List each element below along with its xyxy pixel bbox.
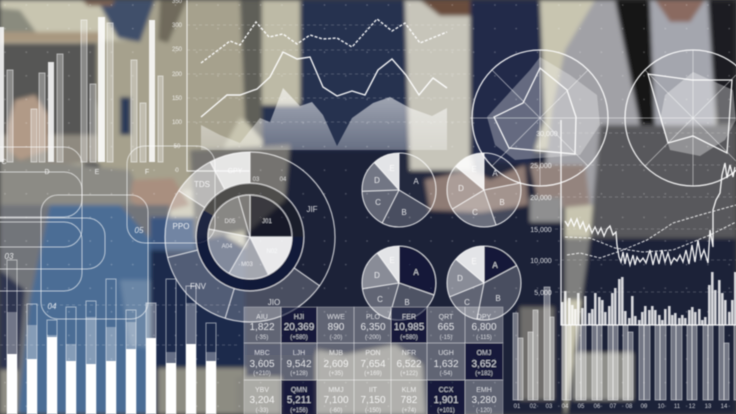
dashed trend line upper — [565, 222, 736, 252]
table row 1: (-20) — [330, 335, 342, 341]
pie chart 2: D — [458, 184, 464, 193]
table row 1: 890 — [328, 322, 345, 333]
right chart x-axis labels — [514, 404, 728, 410]
pie chart 2: E — [471, 165, 477, 174]
table cells — [244, 307, 503, 414]
table row 1: (-15) — [440, 335, 452, 341]
right chart x-axis labels: 05 — [578, 404, 585, 410]
table row 2: NFR — [402, 350, 416, 357]
pie chart 3: A — [413, 268, 419, 277]
pie chart 4: A — [492, 261, 498, 270]
right chart x-axis labels: 01 — [514, 404, 521, 410]
pie chart 1: A — [413, 177, 419, 186]
pie chart 3: B — [404, 298, 410, 307]
right chart x-axis labels: 04 — [562, 404, 569, 410]
table row 2: (+169) — [364, 371, 382, 377]
pie chart 3: E — [389, 256, 395, 265]
pie chart 1: D — [374, 176, 380, 185]
bar group labels — [1, 159, 149, 176]
radar chart 1 — [472, 50, 608, 186]
right chart lower bars — [513, 287, 736, 400]
table row 3: (-33) — [256, 408, 268, 414]
table row 3: (-120) — [476, 408, 492, 414]
solid line chart — [201, 52, 447, 117]
right chart x-axis labels: 11 — [674, 404, 681, 410]
rounded outline panels — [0, 146, 215, 319]
table row 3: QMN — [291, 387, 307, 394]
pie chart 4: E — [471, 257, 477, 266]
table row 2: (+35) — [329, 371, 343, 377]
table row 1: 665 — [438, 322, 455, 333]
line chart axis: 200 — [172, 72, 183, 78]
right chart x-axis labels: 13 — [705, 404, 712, 410]
table row 3: 782 — [401, 395, 418, 406]
donut labels: 03 — [253, 177, 260, 183]
table row 2: 3,605 — [249, 359, 275, 370]
table row 3: (+101) — [437, 408, 455, 414]
dashed line chart — [201, 19, 447, 63]
panel numbers: 04 — [48, 302, 57, 311]
table row 1: QRT — [439, 314, 454, 321]
pie chart 3: D — [374, 271, 380, 280]
table row 1: (+580) — [290, 335, 308, 341]
donut labels: JIO — [268, 298, 280, 307]
table row 3: (-150) — [365, 408, 381, 414]
panel numbers: 03 — [5, 252, 14, 261]
table row 1: WWE — [327, 314, 345, 321]
panel numbers: 05 — [135, 226, 144, 235]
line chart frame — [187, 0, 250, 171]
table row 3: 7,100 — [323, 395, 349, 406]
table row 1: 6,800 — [471, 322, 497, 333]
centre person — [262, 0, 300, 105]
donut labels: PPO — [173, 222, 189, 231]
table row 3: YBV — [255, 387, 269, 394]
gridlines — [0, 25, 736, 345]
table row 2: (+210) — [253, 371, 271, 377]
right chart x-axis labels: 12 — [689, 404, 696, 410]
right chart x-axis labels: 08 — [626, 404, 633, 410]
table row 3: 7,150 — [360, 395, 386, 406]
table row 2: 7,654 — [360, 359, 386, 370]
donut outlines — [165, 152, 335, 322]
table row 2 — [249, 350, 497, 377]
donut labels: TDS — [194, 180, 210, 189]
right chart axis — [530, 163, 552, 297]
table row 1 — [249, 314, 497, 341]
table row 2: (+182) — [475, 371, 493, 377]
table row 3: 5,211 — [287, 395, 312, 406]
table row 2: OMJ — [477, 350, 491, 357]
top-left bar chart — [0, 17, 163, 162]
bar group labels: D — [44, 169, 50, 176]
pie chart 1: E — [389, 164, 395, 173]
line chart axis: 300 — [172, 23, 183, 29]
table row 3: MMJ — [328, 387, 344, 394]
donut labels: D05 — [224, 219, 236, 225]
table row 1: (-200) — [365, 335, 381, 341]
line chart axis: 0 — [175, 168, 179, 174]
middle ring — [184, 171, 316, 303]
right chart x-axis labels: 03 — [546, 404, 553, 410]
table row 1: HJI — [294, 314, 304, 321]
table row 3: KLM — [402, 387, 416, 394]
pie chart 3: C — [377, 295, 383, 304]
table row 3: (+74) — [402, 408, 416, 414]
table row 3: 3,280 — [471, 395, 497, 406]
right chart axis: 10,000 — [530, 258, 552, 265]
donut chart — [153, 140, 347, 334]
pie chart 2: A — [492, 169, 498, 178]
line chart axis: 50 — [174, 144, 181, 150]
bottom-left stacked bars — [7, 260, 216, 414]
donut labels: N02 — [266, 249, 278, 255]
right chart axis: 20,000 — [530, 195, 552, 202]
donut labels: 04 — [280, 177, 287, 183]
inner pie sectors — [221, 208, 279, 266]
table row 2: MBC — [254, 350, 270, 357]
table row 1: (-115) — [476, 335, 492, 341]
right chart x-axis labels: 14 — [721, 404, 728, 410]
table row 3: (+156) — [290, 408, 308, 414]
right chart axis: 15,000 — [530, 227, 552, 234]
table row 2: (+128) — [290, 371, 308, 377]
pie chart 4 — [447, 246, 521, 320]
jagged price line — [565, 163, 735, 265]
pie chart 1: B — [401, 208, 407, 217]
right chart x-axis labels: 10 — [658, 404, 665, 410]
right chart x-axis labels: 06 — [594, 404, 601, 410]
donut labels: GPY — [228, 168, 243, 175]
bar group labels: F — [145, 169, 149, 176]
radar chart 2 — [625, 50, 736, 186]
table row 2: (+122) — [400, 371, 418, 377]
donut labels — [173, 168, 318, 307]
right person — [545, 0, 640, 205]
table row 2: 1,632 — [433, 359, 459, 370]
pie chart 2: C — [472, 208, 478, 217]
table row 2: 9,542 — [286, 359, 312, 370]
pie chart 3 — [362, 246, 436, 320]
line chart axis — [172, 0, 183, 174]
table row 1: (-35) — [256, 335, 268, 341]
table row 2: (-54) — [440, 371, 452, 377]
right chart axis: 25,000 — [530, 163, 552, 170]
line chart axis: 100 — [172, 120, 183, 126]
donut labels: JIF — [306, 205, 318, 214]
radar chart 1: 30,000 — [536, 131, 558, 138]
data table — [244, 307, 503, 414]
table row 1: AIU — [256, 314, 268, 321]
table row 2: 6,522 — [396, 359, 422, 370]
panel numbers — [5, 226, 144, 311]
table row 3: 3,204 — [249, 395, 275, 406]
line chart axis: 250 — [172, 47, 183, 53]
right chart x-axis labels: 09 — [641, 404, 648, 410]
pie chart 4: C — [464, 298, 470, 307]
pie chart 4: D — [457, 274, 463, 283]
pie chart 1 — [362, 153, 436, 227]
table row 2: PON — [365, 350, 381, 357]
pie chart 1: C — [375, 198, 381, 207]
table row 2: 3,652 — [471, 359, 497, 370]
table row 2: UGH — [438, 350, 454, 357]
donut labels: A04 — [222, 244, 233, 250]
pie chart 4: B — [495, 294, 501, 303]
table row 3 — [249, 387, 497, 414]
table row 3: (-60) — [330, 408, 342, 414]
right chart axis: 5,000 — [534, 290, 552, 297]
donut labels: M03 — [241, 262, 253, 268]
bar group labels: C — [1, 159, 7, 166]
pie chart 2 — [447, 153, 521, 227]
table row 3: IIT — [369, 387, 378, 394]
horizontal radar baseline — [470, 117, 736, 119]
table row 1: (+580) — [400, 335, 418, 341]
right chart x-axis labels: 02 — [530, 404, 537, 410]
donut labels: FNV — [190, 282, 207, 291]
donut labels: J01 — [262, 219, 272, 225]
pie chart 2: B — [499, 198, 505, 207]
table row 1: 6,350 — [360, 322, 386, 333]
table row 1: FER — [402, 314, 416, 321]
table row 1: DPY — [477, 314, 492, 321]
left person — [0, 8, 36, 32]
right chart frame — [561, 120, 736, 325]
table row 2: 2,609 — [323, 359, 349, 370]
table row 3: 1,901 — [433, 395, 459, 406]
dashed trend line lower — [567, 205, 736, 258]
table row 2: LJH — [293, 350, 305, 357]
table row 1: PLO — [366, 314, 381, 321]
area chart — [201, 88, 447, 150]
right chart x-axis labels: 07 — [610, 404, 617, 410]
table row 3: EMH — [476, 387, 492, 394]
table row 1: 20,369 — [284, 322, 315, 333]
table row 2: MJB — [329, 350, 343, 357]
right chart small bars — [561, 272, 736, 325]
line chart axis: 150 — [172, 96, 183, 102]
table row 3: CCX — [439, 387, 454, 394]
bar group labels: E — [95, 169, 100, 176]
table row 1: 10,985 — [394, 322, 425, 333]
table row 1: 1,822 — [249, 322, 275, 333]
outer ring sectors — [153, 140, 347, 334]
